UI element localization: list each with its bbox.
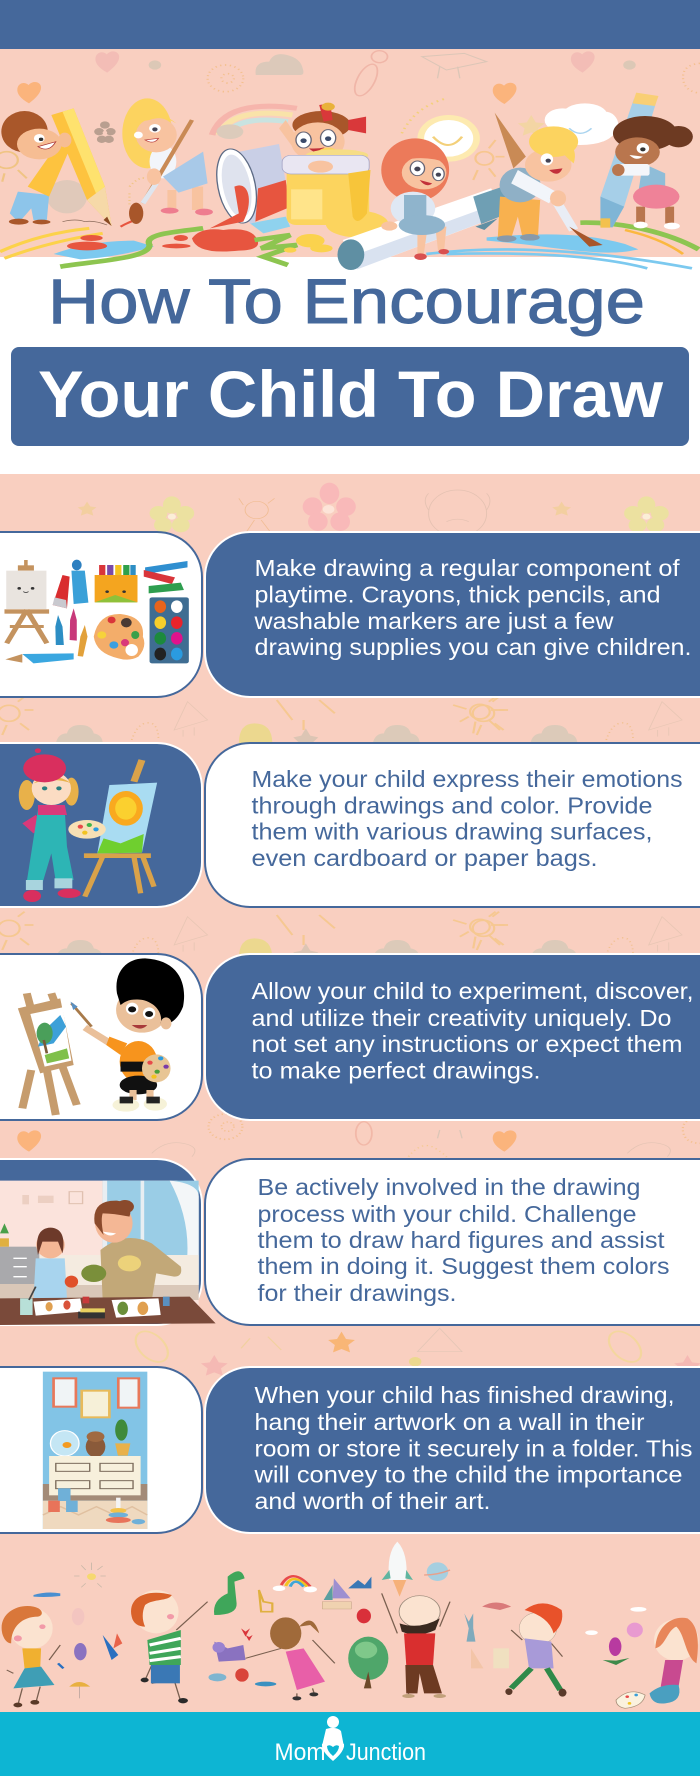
- text block 1: [253, 555, 692, 660]
- girl with pigtail: [208, 1617, 335, 1700]
- text block 5: will convey to the child the importance: [253, 1462, 682, 1488]
- giant white crayon tube: [338, 186, 508, 270]
- title banner: [11, 347, 689, 446]
- tipped paint can: [210, 144, 290, 228]
- title area background: [0, 257, 700, 474]
- image card 2: [0, 743, 202, 907]
- girl with giant marker: [600, 93, 693, 229]
- boy with giant pencil: [1, 108, 112, 226]
- text block 5: and worth of their art.: [254, 1488, 490, 1514]
- footer bar: [0, 1712, 700, 1776]
- icon: art supplies: [4, 560, 189, 663]
- faint grey blobs: [47, 180, 87, 213]
- icon: girl painting at easel: [19, 748, 157, 902]
- rainbow: [212, 106, 297, 135]
- kid with striped shirt: [131, 1590, 208, 1703]
- text block 2: through drawings and color. Provide: [252, 792, 652, 818]
- paint strokes on the ground: [0, 217, 699, 268]
- image card 5: [0, 1367, 202, 1533]
- text block 5: hang their artwork on a wall in their: [254, 1409, 645, 1435]
- text card 2: [205, 743, 700, 907]
- icon: boy painting at easel: [18, 958, 184, 1115]
- image card 4: [0, 1159, 202, 1325]
- text block 1: playtime. Crayons, thick pencils, and: [254, 582, 660, 608]
- dinosaur, giraffe and rainbow doodles: [214, 1571, 371, 1615]
- panel: tip 2: [0, 743, 700, 907]
- blond boy with brush: [495, 113, 603, 247]
- header background doodles: [0, 51, 700, 213]
- text block 1: drawing supplies you can give children.: [254, 634, 692, 660]
- text block 4: them in doing it. Suggest them colors: [258, 1253, 670, 1279]
- title line 2: Your Child To Draw: [38, 357, 664, 431]
- logo mark: mother and heart: [322, 1716, 344, 1761]
- text card 4: [205, 1159, 700, 1325]
- illustration: doodled children footer: [2, 1542, 699, 1708]
- logo: MomJunction: Junction: [346, 1739, 426, 1766]
- image card 1: [0, 532, 202, 697]
- jumping kid: [505, 1603, 567, 1697]
- text block 2: them with various drawing surfaces,: [252, 818, 652, 844]
- white cloud: [545, 103, 618, 145]
- text block 3: not set any instructions or expect them: [252, 1031, 682, 1057]
- text block 5: [253, 1382, 692, 1514]
- text block 3: to make perfect drawings.: [252, 1058, 540, 1084]
- logo: MomJunction: [274, 1716, 426, 1766]
- text card 3: [205, 954, 700, 1120]
- text block 1: Make drawing a regular component of: [254, 555, 680, 581]
- bearded man: [348, 1593, 511, 1698]
- image card 3: [0, 954, 202, 1120]
- text block 4: Be actively involved in the drawing: [258, 1174, 640, 1200]
- title line 1: How To Encourage: [48, 267, 645, 337]
- small doodles left: [33, 1563, 122, 1698]
- sun with smile: [417, 115, 480, 162]
- illustration: mother and child finger painting: [0, 1181, 216, 1325]
- text block 3: [252, 978, 694, 1084]
- yellow paint can with kid: [279, 103, 388, 237]
- illustration: kids painting: [0, 93, 699, 270]
- panel: main content background: [0, 474, 700, 1712]
- text block 4: for their drawings.: [258, 1280, 456, 1306]
- text card 1: [205, 532, 700, 697]
- panel: tip 3: [0, 954, 700, 1120]
- rocket and planet doodles: [382, 1542, 450, 1597]
- panel: tip 4: [0, 1159, 700, 1325]
- panel: tip 5: [0, 1367, 700, 1533]
- logo: MomJunction: Mom: [274, 1739, 326, 1766]
- text block 1: washable markers are just a few: [253, 608, 614, 634]
- text card 5: [205, 1367, 700, 1533]
- text block 5: room or store it securely in a folder. This: [254, 1436, 692, 1462]
- text block 5: When your child has finished drawing,: [254, 1382, 674, 1408]
- text block 4: [258, 1174, 670, 1306]
- red-haired girl sitting: [381, 138, 449, 260]
- girl with palette: [585, 1607, 699, 1708]
- text block 3: Allow your child to experiment, discover,: [252, 978, 694, 1004]
- flower doodle: [94, 121, 116, 143]
- kid with blue skirt: [2, 1606, 60, 1707]
- text block 2: Make your child express their emotions: [252, 766, 682, 792]
- panel: tip 1: [0, 532, 700, 697]
- text block 2: [252, 766, 682, 871]
- text block 4: them to draw hard figures and assist: [258, 1227, 665, 1253]
- illustration: kid room with framed art: [43, 1372, 147, 1529]
- panel: header illustration background: [0, 49, 700, 257]
- background doodle rows: [0, 483, 700, 958]
- top bar: [0, 0, 700, 49]
- text block 2: even cardboard or paper bags.: [252, 845, 598, 871]
- girl with paintbrush: [122, 98, 213, 224]
- text block 3: and utilize their creativity uniquely. Do: [252, 1005, 672, 1031]
- text block 4: process with your child. Challenge: [258, 1201, 636, 1227]
